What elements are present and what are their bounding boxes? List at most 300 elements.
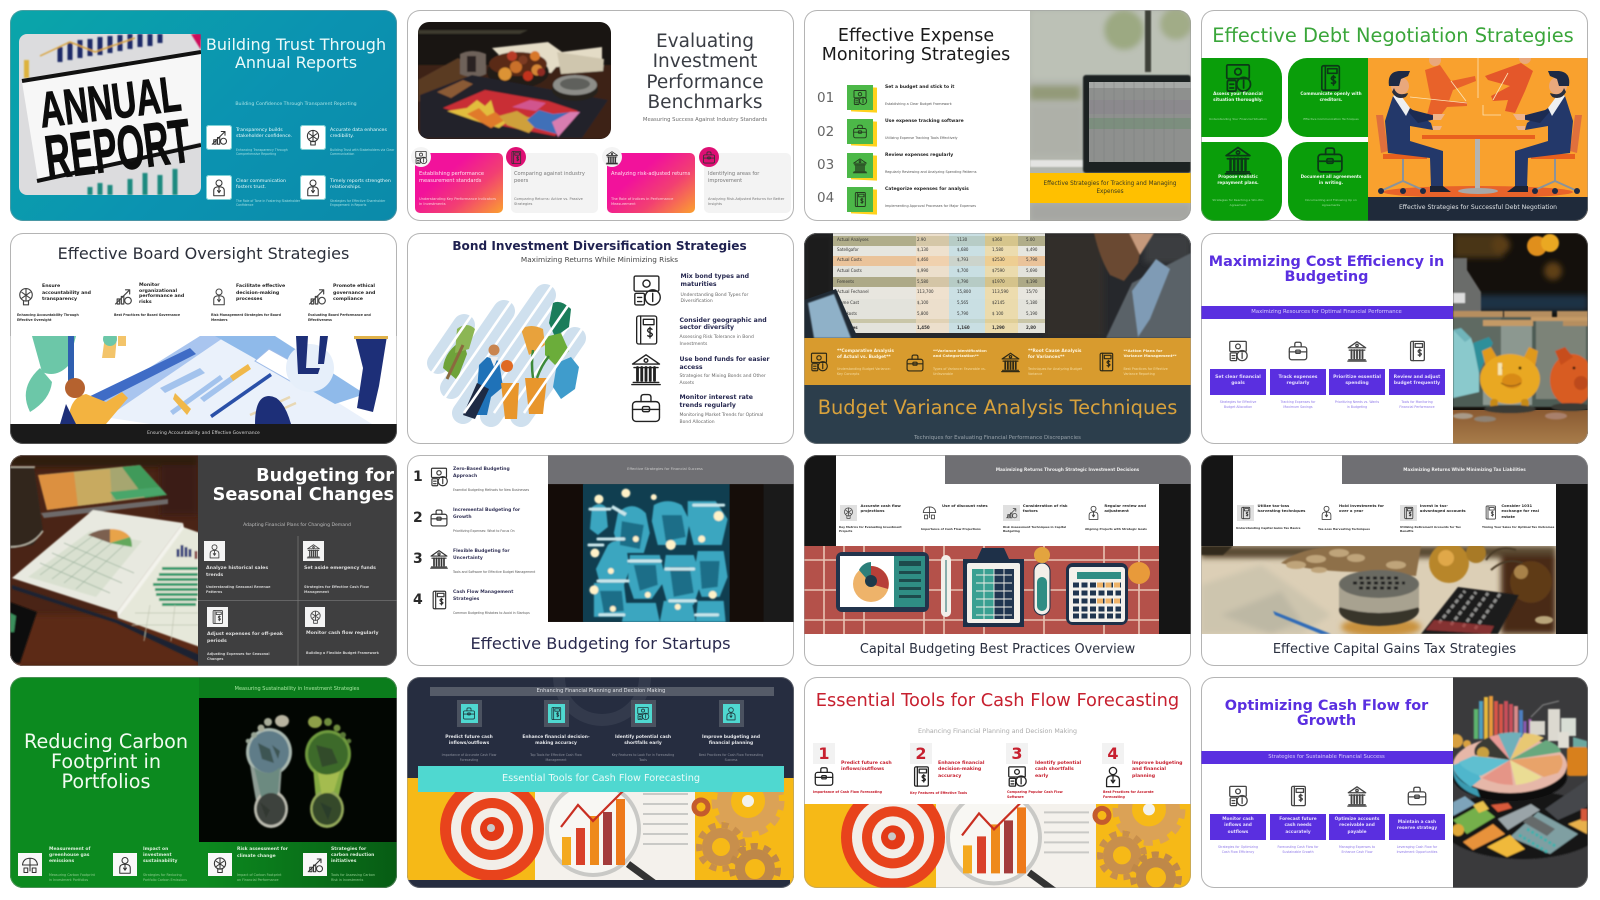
tile: propose: Propose realistic <box>1218 174 1258 179</box>
card: establishing standards <box>411 147 503 213</box>
item: predict <box>426 700 512 766</box>
title: Investment <box>653 51 757 72</box>
tile: communicate: Communicate openly with <box>1300 91 1362 96</box>
item: enhance: Management <box>546 758 566 762</box>
card: comparing peers <box>506 147 598 213</box>
band text: Effective Strategies for Successful Debt Negotiation <box>1399 204 1557 211</box>
item: accountability: Ensure <box>42 284 60 289</box>
list row 1 <box>817 84 954 113</box>
title: Benchmarks <box>647 92 763 113</box>
item 3: Identify potential <box>1035 760 1081 766</box>
list item 3 <box>411 548 545 580</box>
column: monitor: inflows and <box>1224 823 1252 828</box>
title: Footprint in <box>51 750 161 773</box>
band: header <box>944 455 1191 484</box>
card: comparing peers: Strategies <box>514 202 532 206</box>
photo: spreadsheet and analyst: 1,290 <box>992 324 1005 330</box>
item: discount rates: Importance of Cash Flow Projections <box>921 527 981 531</box>
photo: annual report sign <box>19 34 201 195</box>
list item 4: Cash Flow Management <box>453 590 513 595</box>
item: measurement: emissions <box>49 859 74 864</box>
panel: Maximizing Cost Efficiency in Budgeting <box>1201 232 1588 444</box>
illustration: diagonal stripes with investor watering plants <box>427 284 586 427</box>
photo: spreadsheet and analyst: $2145 <box>992 300 1005 304</box>
band text: Effective Strategies for Financial Success <box>627 466 703 470</box>
item: ethical governance: Promote ethical <box>333 284 375 289</box>
column: track expenses: Track expenses <box>1279 375 1317 380</box>
band text: Maximizing Returns Through Strategic Investment Decisions <box>996 467 1139 472</box>
item: climate risk: climate change <box>237 854 276 858</box>
panel: Budget Variance Analysis Techniques <box>804 232 1191 444</box>
column: clear goals: Set clear financial <box>1215 375 1261 380</box>
card: risk-adjusted returns: Analyzing risk-adjusted returns <box>611 171 690 177</box>
item: decision making: Members <box>211 318 228 322</box>
technique: root cause: **Root Cause Analysis <box>1028 348 1081 354</box>
band text: Expenses <box>1096 189 1124 195</box>
photo: spreadsheet and analyst: 5,580 <box>917 278 929 284</box>
item: reduction initiatives: Risk in Investments <box>331 878 363 882</box>
item: enhance <box>513 700 599 766</box>
header text: Measuring Sustainability in Investment Strategies <box>235 686 359 692</box>
black strip right <box>1556 484 1588 634</box>
cell: monitor cash flow: Monitor cash flow regularly <box>306 631 379 636</box>
photo: spreadsheet and analyst: $7590 <box>992 268 1005 272</box>
technique: action plans: Best Practices for Effective <box>1124 367 1168 371</box>
item: geographic diversity: Investments <box>680 342 707 347</box>
footer text: Ensuring Accountability and Effective Governance <box>147 430 260 436</box>
list row 2: Utilizing Expense Tracking Tools Effectively <box>885 136 958 140</box>
cell: emergency funds: Set aside emergency funds <box>304 566 376 571</box>
item: regular review: adjustment <box>1104 508 1129 513</box>
photo: spreadsheet and analyst: 5,790 <box>1026 256 1038 262</box>
card: risk-adjusted returns: The Role of Indices in Performance <box>611 197 673 201</box>
column: essential spending: spending <box>1345 381 1369 386</box>
panel: Effective Expense Monitoring Strategies <box>804 10 1191 221</box>
photo: spreadsheet and analyst: 5,190 <box>1026 310 1038 316</box>
card: improvement: Analyzing Risk-Adjusted Returns for Better <box>708 197 784 201</box>
item: communication: fosters trust. <box>236 185 266 190</box>
item 1: Predict future cash <box>841 760 892 766</box>
column: forecast: Forecast future <box>1279 817 1317 822</box>
photo: spreadsheet and analyst: $,490 <box>1026 246 1038 252</box>
item: improve: Improve budgeting and <box>702 735 760 740</box>
technique: root cause: Techniques for Analyzing Budget <box>1028 367 1082 371</box>
scene: target, magnifier and gears <box>804 804 1191 888</box>
tile: communicate: creditors. <box>1320 97 1342 102</box>
watermark ring <box>537 677 667 727</box>
item: measurement: in Investment Portfolios <box>49 878 88 882</box>
photo: spreadsheet and analyst: $,793 <box>957 256 969 262</box>
illustration: budget tablets on red grid <box>804 546 1159 634</box>
tile: assess: situation thoroughly. <box>1213 97 1263 102</box>
title: Annual Reports <box>235 53 357 72</box>
panel: Bond Investment Diversification Strategies <box>407 232 794 444</box>
photo: spreadsheet and analyst: Fements <box>837 278 854 284</box>
cell: analyze sales: Patterns <box>206 590 222 594</box>
item: tax-loss harvesting <box>1235 503 1315 537</box>
item: investment impact: investment <box>143 853 172 858</box>
tile: communicate: Effective Communication Techniques <box>1303 116 1359 120</box>
panel: Building Trust Through Annual Reports <box>10 10 397 221</box>
item: climate risk <box>208 845 300 887</box>
item: monitor <box>114 282 184 317</box>
item: risk factors: Budgeting <box>1003 529 1020 533</box>
item 4: Forecasting <box>1103 795 1125 799</box>
column: monitor <box>1210 783 1266 859</box>
item: enhance: Enhance financial decision- <box>522 735 590 740</box>
technique: comparative analysis: Understanding Budget Variance: <box>837 367 891 371</box>
list item 4: Common Budgeting Mistakes to Avoid in Startups <box>453 610 530 614</box>
item: accountability: transparency <box>42 297 77 302</box>
item: risk factors <box>1002 503 1082 537</box>
title <box>822 26 1010 65</box>
tile: document <box>1288 142 1368 221</box>
item 4: Best Practices for Accurate <box>1103 790 1154 794</box>
item 3: Software <box>1007 795 1024 799</box>
item: regular review <box>1084 503 1164 537</box>
illustration: board documents <box>10 336 397 424</box>
column: essential spending: Prioritize essential <box>1333 375 1381 380</box>
cell: off-peak expenses: Changes <box>207 656 223 660</box>
photo: spreadsheet and analyst: $1970 <box>992 278 1005 284</box>
item: decision making: Facilitate effective <box>236 284 285 289</box>
photo: bowl and chart on table <box>418 22 611 139</box>
item: regular review: Aligning Projects with Strategic Goals <box>1085 527 1147 531</box>
title <box>646 31 764 113</box>
column: forecast: Sustainable Growth <box>1282 850 1314 854</box>
card: comparing peers: peers <box>514 178 528 184</box>
item: accuracy: credibility. <box>330 134 354 139</box>
list item 2: Growth <box>453 515 472 520</box>
item: bond funds: Strategies for Mixing Bonds and Other <box>680 374 766 379</box>
title: Effective Board Oversight Strategies <box>58 244 349 262</box>
item: tax-advantaged accounts: Benefits <box>1400 529 1413 533</box>
column: clear goals: Strategies for Effective <box>1220 400 1256 404</box>
item: investment impact: Strategies for Reducing <box>143 873 182 877</box>
card: comparing peers: Comparing against industry <box>514 171 585 177</box>
item: identify: shortfalls early <box>624 741 662 746</box>
item: geographic diversity: sector diversity <box>680 324 734 331</box>
item: reduction initiatives: carbon reduction <box>331 853 374 858</box>
technique: root cause: for Variances** <box>1028 354 1064 360</box>
subtitle: Measuring Success Against Industry Standards <box>643 117 767 123</box>
item: interest rate trends <box>632 394 763 425</box>
panel: Effective Debt Negotiation Strategies <box>1201 10 1588 221</box>
photo: laptop by window <box>1030 10 1191 221</box>
card: improvement: Insights <box>708 202 722 206</box>
item: 1031 exchange: estate <box>1501 514 1515 519</box>
photo: spreadsheet and analyst: 113,700 <box>917 288 934 294</box>
item: timely reports: Engagement in Reports <box>330 203 366 207</box>
cell: analyze sales: Analyze historical sales <box>206 566 268 571</box>
list row 4: Categorize expenses for analysis <box>885 187 969 192</box>
card: establishing standards: Understanding Key Performance Indicators <box>419 197 496 201</box>
column: reserve: Maintain a cash <box>1398 820 1436 825</box>
column: essential spending: Prioritizing Needs vs. Wants <box>1335 400 1379 404</box>
column: review budget: Review and adjust <box>1394 375 1440 380</box>
column: forecast <box>1270 783 1326 859</box>
photo: piggy banks and coin jars <box>1453 233 1588 444</box>
column: forecast: cash needs <box>1284 823 1312 828</box>
item: mix bond types: Mix bond types and <box>680 273 749 280</box>
item: ethical governance: governance and <box>333 291 375 296</box>
photo: spreadsheet and analyst: Actual Costs <box>837 268 862 272</box>
tile: propose: Strategies for Reaching a Win-Win <box>1212 198 1264 202</box>
list item 1: 1 <box>413 469 423 485</box>
photo: spreadsheet and analyst: $2530 <box>992 256 1005 262</box>
subtitle: Adapting Financial Plans for Changing Demand <box>243 523 351 528</box>
band: subtitle <box>1201 306 1453 319</box>
item: mix bond types: maturities <box>680 281 717 288</box>
item: reduction initiatives: Tools for Assessing Carbon <box>331 873 375 877</box>
header text: Enhancing Financial Planning and Decision Making <box>537 688 665 694</box>
band: technique items <box>804 338 1191 385</box>
card: establishing standards: measurement standards <box>419 178 481 184</box>
list row 3: 03 <box>817 156 834 172</box>
technique: action plans: **Action Plans for <box>1124 348 1162 352</box>
band: header <box>548 455 794 484</box>
cell: off-peak expenses: Adjust expenses for off-peak <box>207 632 283 637</box>
photo: spreadsheet and analyst: Actual Analyses <box>837 236 869 242</box>
cell dividers <box>198 536 397 666</box>
title <box>1209 254 1444 285</box>
band text: Maximizing Resources for Optimal Financial Performance <box>1251 309 1402 315</box>
item 4: 4 <box>1107 744 1119 763</box>
item: geographic diversity: Consider geographic and <box>680 316 767 324</box>
photo: spreadsheet and analyst: 2.90 <box>917 236 926 242</box>
photo: spreadsheet and analyst: 1130 <box>957 236 968 242</box>
item: interest rate trends: Monitor interest rate <box>680 394 753 401</box>
tile: communicate <box>1288 58 1368 137</box>
column: reserve: Leveraging Cash Flow for <box>1397 845 1437 849</box>
item: monitor: performance and <box>139 294 184 299</box>
item: 1031 exchange <box>1481 503 1561 537</box>
title: Monitoring Strategies <box>822 45 1010 65</box>
column: review budget <box>1389 340 1445 408</box>
item: 1031 exchange: Timing Your Sales for Optimal Tax Outcomes <box>1482 525 1554 529</box>
panel: Reducing Carbon Footprint in Portfolios <box>10 677 397 888</box>
column: track expenses <box>1270 342 1326 408</box>
panel: Capital Budgeting Best Practices Overview <box>804 455 1191 666</box>
photo: spreadsheet and analyst: 15/70 <box>1026 288 1038 294</box>
item: decision making: processes <box>236 297 262 302</box>
item 4 <box>1102 743 1190 802</box>
item: enhance: making accuracy <box>535 741 577 746</box>
column: forecast: accurately <box>1285 830 1311 835</box>
footer band <box>10 424 397 444</box>
photo: spreadsheet and analyst: $,100 <box>917 300 929 304</box>
title: Reducing Carbon <box>24 730 188 753</box>
item: discount rates: Use of discount rates <box>942 503 988 508</box>
panel: Essential Tools for Cash Flow Forecasting, dark <box>407 677 794 888</box>
item 4: Improve budgeting <box>1132 760 1183 766</box>
panel: Optimizing Cash Flow for Growth <box>1201 677 1588 888</box>
photo: spreadsheet and analyst: 113,590 <box>992 288 1009 294</box>
item: timely reports <box>300 175 391 207</box>
band: debt subtitle <box>1368 197 1588 221</box>
item: tax-advantaged accounts: Invest in tax- <box>1420 503 1448 508</box>
list item 3: 3 <box>413 551 423 567</box>
technique: variance identification <box>906 348 987 376</box>
list item 1 <box>411 466 545 498</box>
item: regular review: Regular review and <box>1104 503 1146 508</box>
list row 2: Use expense tracking software <box>885 119 964 124</box>
photo: coins, map and calculator <box>1201 546 1556 634</box>
column: clear goals <box>1210 340 1266 408</box>
title: Bond Investment Diversification Strategies <box>452 238 747 252</box>
title: Optimizing Cash Flow for <box>1225 698 1428 714</box>
item: transparency <box>206 125 292 156</box>
band: header <box>430 687 774 696</box>
item: cash flow projections: Accurate cash flow <box>860 503 901 508</box>
bottom band <box>10 842 397 888</box>
photo: glowing blue jars <box>548 484 794 622</box>
column: essential spending <box>1329 341 1385 408</box>
tile: document: in writing. <box>1319 180 1343 185</box>
item: geographic diversity: Assessing Risk Tolerance in Bond <box>680 335 754 340</box>
photo: spreadsheet and analyst: $,460 <box>917 256 929 262</box>
subtitle: Maximizing Returns While Minimizing Risks <box>521 254 678 264</box>
subtitle: Enhancing Financial Planning and Decision Making <box>918 728 1077 735</box>
list item 2: 2 <box>413 510 423 526</box>
item: timely reports: Timely reports strengthen <box>330 179 391 184</box>
card: improvement: improvement <box>708 178 742 184</box>
item 3: 3 <box>1011 744 1023 763</box>
item: climate risk: Impact of Carbon Footprint <box>237 873 281 877</box>
list row 4 <box>817 186 976 215</box>
item: bond funds: Use bond funds for easier <box>680 356 770 363</box>
item 4: and financial <box>1132 767 1166 772</box>
list row 3: Review expenses regularly <box>885 153 953 158</box>
item: investment impact: Impact on <box>143 847 168 852</box>
photo: spreadsheet and analyst: $360 <box>992 236 1003 242</box>
item: accuracy: Communication <box>330 152 354 156</box>
item: predict: Forecasting <box>460 758 478 762</box>
list item 3: Uncertainty <box>453 556 483 561</box>
item 3 <box>1006 743 1098 802</box>
card: improvement <box>699 147 791 213</box>
item: accountability: Enhancing Accountability Through <box>17 313 79 317</box>
item: monitor: Monitor <box>139 283 160 288</box>
list item 1: Approach <box>453 474 477 479</box>
column: review budget: budget frequently <box>1394 381 1440 386</box>
band title: Essential Tools for Cash Flow Forecasting <box>502 773 700 784</box>
photo: spreadsheet and analyst: 1,580 <box>992 246 1004 252</box>
technique: action plans: Variance Management** <box>1124 353 1177 358</box>
title: Essential Tools for Cash Flow Forecasting <box>816 690 1179 711</box>
column: monitor: Monitor cash <box>1222 817 1254 822</box>
tile: propose: repayment plans. <box>1217 180 1259 185</box>
photo: spreadsheet and analyst: $,700 <box>957 268 969 272</box>
list row 3: Regularly Reviewing and Analyzing Spending Patterns <box>885 170 976 174</box>
title: Portfolios <box>62 770 150 793</box>
item: hold investments <box>1317 503 1397 537</box>
item: accuracy: Accurate data enhances <box>330 128 387 133</box>
cell: off-peak expenses <box>207 607 297 663</box>
list row 4: Implementing Approval Processes for Major Expenses <box>885 204 976 208</box>
item: accountability: Effective Oversight <box>17 318 51 322</box>
band text: Effective Strategies for Tracking and Managing <box>1044 181 1176 187</box>
list row 4: 04 <box>817 190 834 206</box>
photo: open report on wooden desk <box>10 455 198 666</box>
column: reserve <box>1389 783 1445 859</box>
column: monitor: Cash Flow Efficiency <box>1222 850 1254 854</box>
item: 1031 exchange: Consider 1031 <box>1501 503 1532 508</box>
item: reduction initiatives <box>303 845 395 887</box>
photo: spreadsheet and analyst: $,130 <box>917 246 929 252</box>
item: investment impact: sustainability <box>143 859 177 864</box>
list item 3: Flexible Budgeting for <box>453 549 510 554</box>
cell: emergency funds <box>303 541 395 597</box>
item: accountability: accountability and <box>42 291 91 296</box>
column: accounts: Enhance Cash Flow <box>1342 850 1372 854</box>
item: transparency: Comprehensive Reporting <box>236 152 276 156</box>
item: transparency: stakeholder confidence. <box>236 134 292 139</box>
item: identify: Tools <box>639 758 647 762</box>
item: cash flow projections: Key Metrics for Evaluating Investment <box>839 525 902 529</box>
item: enhance: Top Tools for Effective Cash Flow <box>530 752 582 756</box>
photo: spreadsheet and analyst: $,190 <box>1026 278 1038 284</box>
item: hold investments: Tax-Loss Harvesting Techniques <box>1318 527 1370 531</box>
item: tax-advantaged accounts <box>1399 503 1479 537</box>
cell: emergency funds: Strategies for Effective Cash Flow <box>304 584 369 588</box>
black strip left <box>804 455 836 546</box>
list item 2: Prioritizing Expenses: What to Focus On <box>453 528 515 532</box>
list item 1: Essential Budgeting Methods for New Businesses <box>453 488 529 492</box>
tile: assess <box>1201 58 1282 137</box>
title: Effective Expense <box>838 26 994 46</box>
photo: spreadsheet and analyst: 1,160 <box>957 324 970 330</box>
column: clear goals: goals <box>1231 381 1245 386</box>
tile: document: Documenting and Following Up on <box>1305 198 1357 202</box>
cell: off-peak expenses: Adjusting Expenses for Seasonal <box>207 652 270 656</box>
band: header <box>1342 455 1588 484</box>
technique: comparative analysis: Key Concepts <box>837 372 859 376</box>
item: interest rate trends: Bond Allocation <box>680 420 715 425</box>
item: monitor: Best Practices for Board Governance <box>114 313 180 317</box>
photo: spreadsheet and analyst: 15,800 <box>957 288 971 294</box>
item: investment impact <box>113 845 205 887</box>
item: improve: financial planning <box>709 741 753 746</box>
item: transparency: Enhancing Transparency Through <box>236 148 288 152</box>
cell: analyze sales: trends <box>206 573 223 578</box>
item: ethical governance: compliance <box>333 297 363 302</box>
item: identify: Identify potential cash <box>615 735 671 740</box>
item: improve: Best Practices for Cash Flow Forecasting <box>699 752 763 756</box>
item 1: inflows/outflows <box>841 767 884 772</box>
band text: Maximizing Returns While Minimizing Tax Liabilities <box>1403 467 1526 472</box>
item: communication <box>206 175 300 207</box>
technique: root cause: Variance <box>1028 372 1042 376</box>
item: tax-loss harvesting: harvesting techniques <box>1258 508 1305 513</box>
item: climate risk: Risk assessment for <box>237 847 288 852</box>
title: Maximizing Cost Efficiency in <box>1209 254 1444 270</box>
item: timely reports: Strategies for Effective Shareholder <box>330 199 385 203</box>
item: improve <box>688 700 774 766</box>
technique: comparative analysis: **Comparative Analysis <box>837 348 894 354</box>
photo: spreadsheet and analyst: 5,790 <box>957 310 969 316</box>
list item 4: 4 <box>413 592 423 608</box>
item: risk factors: Risk Assessment Techniques in Capital <box>1003 525 1066 529</box>
panel: Evaluating Investment Performance Benchmarks <box>407 10 794 221</box>
title: Evaluating <box>656 31 754 52</box>
cell: analyze sales: Understanding Seasonal Revenue <box>206 584 270 588</box>
column: review budget: Financial Performance <box>1399 404 1435 408</box>
item 2 <box>910 743 1002 802</box>
technique: root cause <box>1001 348 1082 376</box>
photo: earth footprints <box>199 698 397 842</box>
photo: spreadsheet and analyst: Actual Costs <box>837 256 862 262</box>
